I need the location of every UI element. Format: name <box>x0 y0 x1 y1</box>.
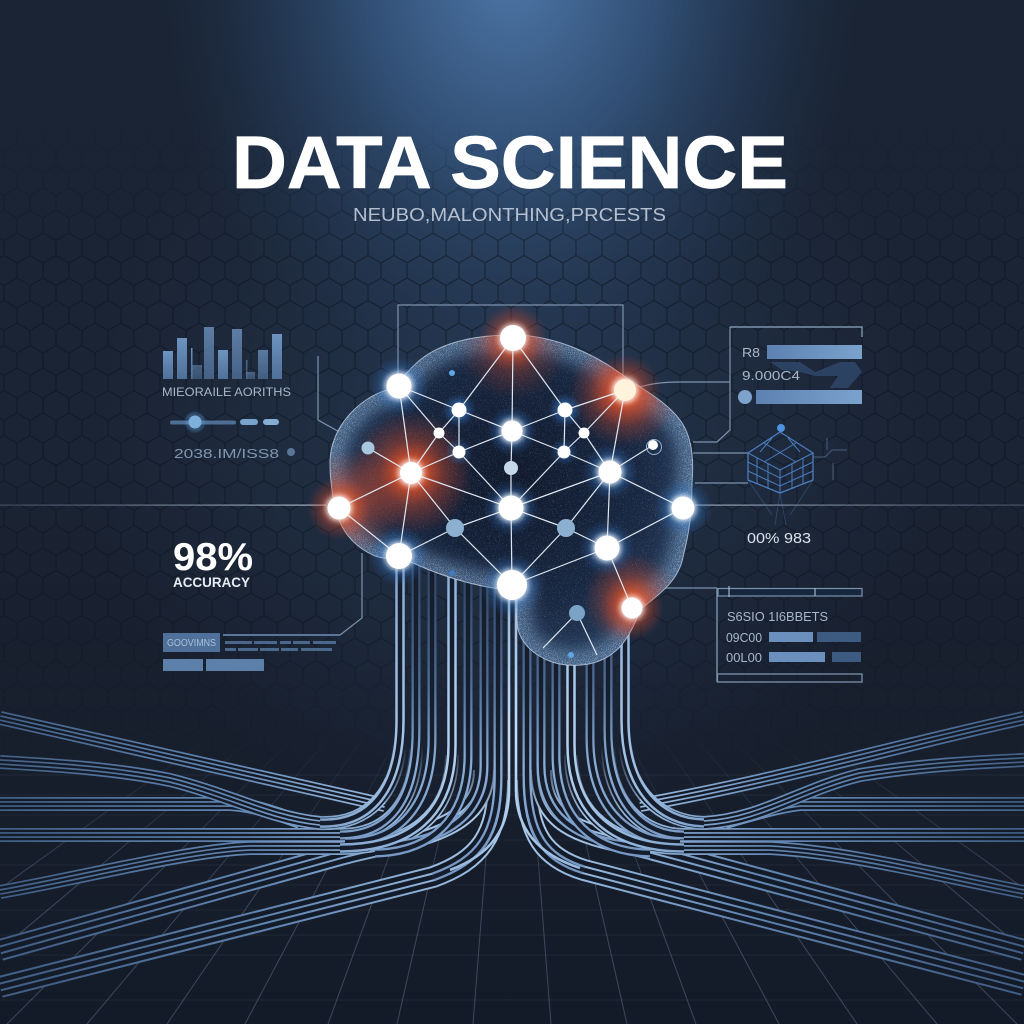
horizontal divider lines <box>0 504 1024 506</box>
stat: 98% accuracy: ACCURACY <box>173 575 250 590</box>
panel: lower right table: 00L00 <box>726 650 762 665</box>
slider value text: 2038.IM/ISS8 <box>174 446 279 461</box>
panel: lower left data block <box>163 633 340 671</box>
panel: upper right data bars: R8 <box>742 345 760 360</box>
network edges <box>339 338 683 655</box>
outer node glows <box>307 304 713 640</box>
panel: lower right table <box>717 586 862 682</box>
perspective floor grid <box>0 730 1024 1024</box>
subtitle: NEUBO,MALONTHING,PRCESTS <box>353 205 666 225</box>
bar chart columns <box>163 327 282 379</box>
panel: upper right data bars: 9.000C4 <box>742 368 800 383</box>
value text under cube: 00% 983 <box>747 531 811 547</box>
stat: 98% accuracy: 98% <box>173 536 253 579</box>
panel: left bar chart <box>162 327 291 399</box>
faded chevrons <box>770 362 862 388</box>
slider value text <box>174 446 295 461</box>
panel: lower right table: S6SIO 1I6BBETS <box>727 609 828 624</box>
panel: upper right data bars <box>730 327 862 404</box>
background <box>84 0 940 736</box>
panel: lower left data block: GOOVIMNS <box>167 638 216 649</box>
network nodes <box>326 324 696 621</box>
title: DATA SCIENCE <box>232 121 788 204</box>
connector lines <box>318 305 748 635</box>
data cables flowing out of the brain <box>0 560 1024 987</box>
panel: lower right table: 09C00 <box>726 630 762 645</box>
slider control <box>170 412 279 432</box>
brain with neural network <box>290 290 713 670</box>
icon: wireframe cube <box>748 424 847 525</box>
brain silhouette <box>330 334 694 666</box>
chart label: MIEORAILE AORITHS <box>162 385 291 399</box>
